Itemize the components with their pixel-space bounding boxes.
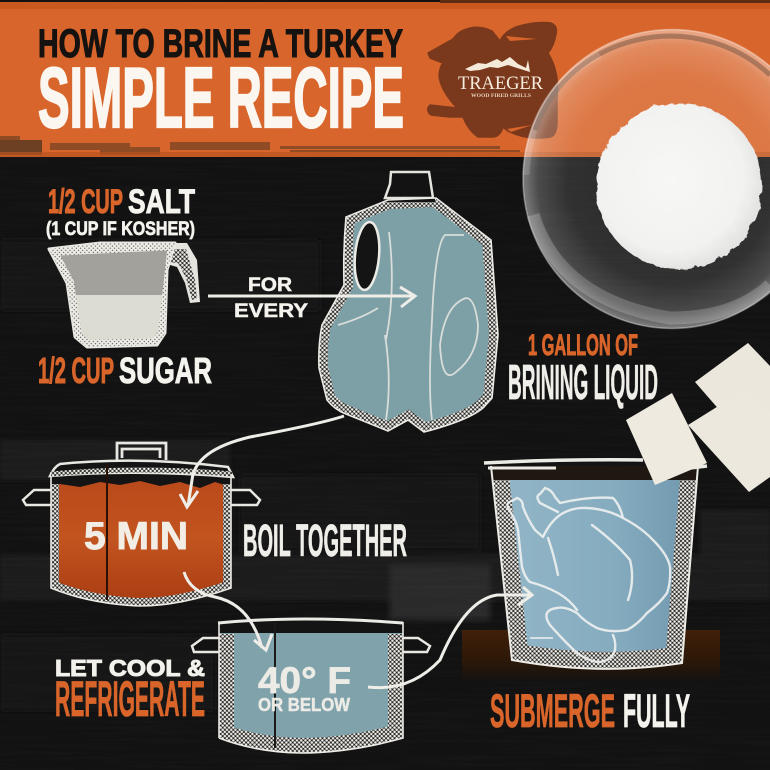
glass bowl with salt (523, 30, 770, 328)
cup handle (167, 243, 200, 303)
icon: gallon jug (319, 172, 498, 432)
bucket rim (484, 460, 707, 468)
gallon label (508, 329, 658, 410)
salt pile (596, 103, 762, 269)
icon: boiling pot with lid (23, 443, 260, 606)
text: FULLY (623, 684, 690, 737)
icon: cooling pot (192, 618, 430, 753)
arrow: boiling pot to cooling pot (184, 572, 272, 650)
title: SIMPLE RECIPE (38, 51, 404, 146)
text: BOIL TOGETHER (243, 515, 407, 566)
arrow: for every: FOR (248, 275, 292, 296)
icon: cooling pot: OR BELOW (258, 695, 350, 715)
arrow: jug to boiling pot (180, 416, 344, 507)
cup body (49, 243, 175, 347)
sugar label: 1/2 CUP (38, 350, 114, 391)
salt label: 1/2 CUP (48, 183, 123, 221)
sugar cubes (626, 343, 770, 492)
refrigerate label: LET COOL & (55, 655, 205, 681)
icon: bucket with turkey in brine (480, 460, 710, 669)
orange header band (0, 0, 770, 157)
icon: measuring cup (49, 243, 200, 347)
logo: Traeger turkey silhouette: TRAEGER (458, 74, 544, 94)
orange glow behind bucket (462, 630, 720, 682)
gallon label: 1 GALLON OF (528, 329, 638, 362)
icon: cooling pot: 40° F (258, 660, 351, 701)
salt label: (1 CUP IF KOSHER) (46, 219, 195, 240)
jug contour lines (338, 232, 478, 420)
logo: Traeger turkey silhouette (428, 22, 558, 138)
salt label (46, 183, 195, 240)
pot body (51, 472, 231, 606)
jug body (319, 198, 498, 432)
salt label: SALT (128, 183, 195, 221)
submerge label: SUBMERGE (490, 684, 615, 737)
title: HOW TO BRINE A TURKEY (38, 22, 403, 66)
turkey outline (508, 488, 670, 662)
sugar label: SUGAR (119, 350, 212, 391)
pot lid (50, 461, 233, 477)
text: REFRIGERATE (55, 671, 205, 727)
title (38, 22, 404, 146)
logo: Traeger turkey silhouette: WOOD FIRED GRILLS (471, 93, 531, 99)
logo mountains (465, 57, 530, 72)
jug cap (385, 172, 433, 198)
arrow: for every (208, 275, 415, 322)
jug handle opening (352, 221, 382, 291)
arrow: cooling pot to bucket (368, 587, 532, 688)
pot lid handle (117, 443, 166, 460)
pot handles (23, 490, 260, 505)
refrigerate label (55, 655, 205, 727)
cool pot handles (192, 638, 430, 652)
arrow: for every: EVERY (234, 301, 308, 322)
icon: boiling pot with lid: 5 MIN (84, 515, 188, 558)
